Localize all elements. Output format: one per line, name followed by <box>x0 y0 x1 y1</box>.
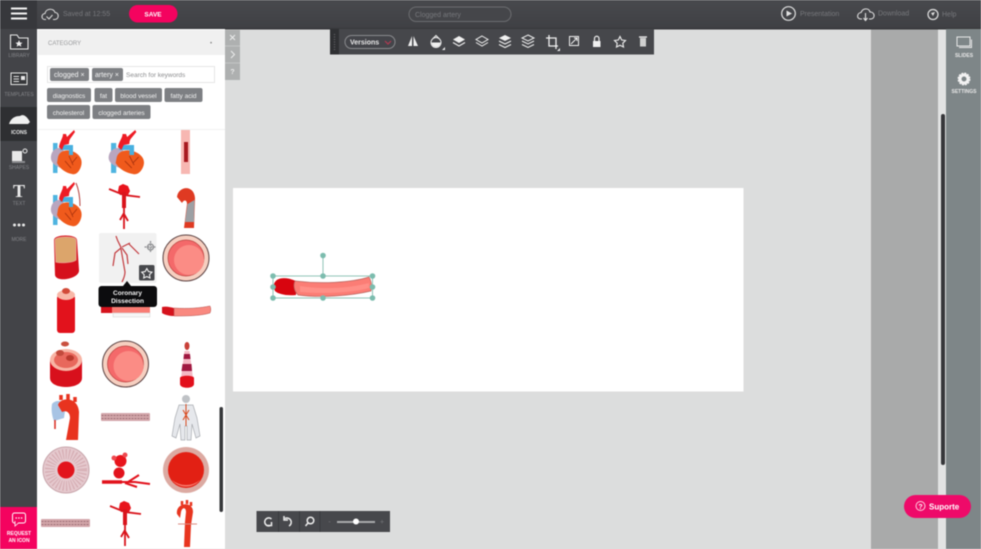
icon grid <box>40 130 224 548</box>
tag: artery <box>92 68 123 81</box>
icon: occluded artery cross-section <box>163 447 209 493</box>
sidebar item: more <box>12 224 27 243</box>
icon: move cursor <box>144 241 156 253</box>
sidebar item: slides <box>955 37 974 59</box>
icon: open artery segment <box>54 236 79 279</box>
tag: clogged <box>50 68 89 81</box>
tooltip: coronary dissection: Dissection <box>111 298 144 305</box>
icon: menu button <box>0 0 37 29</box>
icon: coronary tree <box>110 501 141 546</box>
icon: aortic arch with valve <box>52 394 79 440</box>
object toolbar <box>330 29 654 54</box>
icon: aortic arch <box>177 188 195 228</box>
sidebar item: slides: SLIDES <box>955 53 974 59</box>
icon: aneurysm branch <box>102 452 150 487</box>
panel side controls <box>225 30 240 80</box>
download button <box>858 9 909 20</box>
icon: delete <box>639 37 647 46</box>
versions dropdown <box>345 36 395 48</box>
saved status: Saved at 12:55 <box>63 11 110 18</box>
icon: artery cross-section <box>102 341 148 387</box>
selection handles <box>270 253 375 301</box>
icon: artery wall strip <box>41 519 90 527</box>
category header <box>38 30 225 55</box>
sidebar item: text: TEXT <box>13 201 25 207</box>
suggested keyword tags <box>47 88 202 119</box>
request an icon button: REQUEST <box>7 531 31 537</box>
request an icon button: AN ICON <box>8 538 30 544</box>
search field with tags <box>48 66 214 82</box>
sidebar item: icons active <box>0 107 37 141</box>
icon: bring to front <box>499 35 511 48</box>
panel side controls: ? <box>230 69 235 76</box>
help button <box>928 10 957 20</box>
suggested keyword tags: fatty acid <box>170 93 197 100</box>
icon: bring forward <box>453 36 465 46</box>
icon: stenosed artery vertical <box>181 125 190 174</box>
icon: coronary dissection <box>113 236 139 282</box>
icon: favorite star <box>614 36 626 47</box>
icon: horizontal artery <box>162 306 211 316</box>
icon: crop <box>546 35 560 51</box>
icon: horizontal artery behind tooltip <box>101 305 150 317</box>
icon: send to back <box>522 35 534 48</box>
icon: resize <box>570 36 578 46</box>
selected artery on canvas <box>270 253 375 301</box>
download button: Download <box>878 10 909 18</box>
icon: send backward <box>476 36 488 46</box>
top bar <box>0 0 981 30</box>
icon: search <box>306 517 314 526</box>
artery drawing <box>274 277 372 296</box>
icon: artery wall strip <box>101 413 150 421</box>
icon: coronary tree <box>109 184 140 229</box>
icon: color fill <box>431 36 445 50</box>
support button: Suporte <box>929 502 960 512</box>
icon: descending aorta <box>177 500 197 547</box>
support button: ? <box>918 504 923 511</box>
left icon sidebar <box>0 29 37 549</box>
zoom toolbar <box>256 511 390 532</box>
sidebar item: shapes: SHAPES <box>9 165 30 171</box>
sidebar item: text: T <box>13 181 25 201</box>
canvas workspace background <box>225 29 981 549</box>
canvas scrollbar <box>941 114 945 465</box>
icon library panel <box>37 29 225 549</box>
icon: layered artery cone <box>180 342 194 388</box>
icon: artery cross-section <box>163 235 209 281</box>
sidebar item: templates: TEMPLATES <box>4 92 34 98</box>
sidebar item: more: MORE <box>12 237 27 243</box>
sidebar item: settings <box>951 73 977 95</box>
suggested keyword tags: cholesterol <box>53 110 85 117</box>
zoom slider <box>328 518 384 526</box>
help button: Help <box>942 12 957 18</box>
selection frame <box>273 255 372 298</box>
right grey margin <box>871 29 938 549</box>
suggested keyword tags: fat <box>100 93 107 100</box>
suggested keyword tags: clogged arteries <box>98 110 145 117</box>
support button <box>904 495 971 518</box>
category header: CATEGORY <box>48 41 81 47</box>
versions dropdown: Versions <box>350 40 379 46</box>
right sidebar <box>946 29 981 549</box>
tag: clogged: clogged × <box>54 72 85 79</box>
icon: heart <box>109 130 144 174</box>
icon: cut artery with clots <box>57 288 75 333</box>
sidebar item: shapes <box>9 149 30 171</box>
icon: redo <box>265 518 272 526</box>
icon: undo <box>284 516 291 526</box>
tooltip: coronary dissection: Coronary <box>113 290 142 297</box>
panel scrollbar <box>220 407 223 512</box>
sidebar item: icons active: ICONS <box>11 130 28 136</box>
suggested keyword tags: blood vessel <box>120 93 157 100</box>
icon: short artery with clots <box>50 342 82 387</box>
zoom slider: + <box>380 519 384 526</box>
save button: SAVE <box>144 12 162 18</box>
zoom slider: - <box>328 519 331 526</box>
icon: favorite star button <box>139 265 154 280</box>
icon: human body circulatory system <box>172 395 200 440</box>
sidebar item: templates <box>4 73 34 98</box>
icon: heart <box>51 130 82 174</box>
right scroll track <box>938 29 946 549</box>
sidebar item: settings: SETTINGS <box>951 89 977 95</box>
request an icon button <box>0 507 37 549</box>
icon: thick wall section <box>43 447 89 493</box>
save button <box>129 5 178 22</box>
tag: artery: artery × <box>95 72 119 79</box>
tooltip: coronary dissection <box>98 281 157 307</box>
document title field: Clogged artery <box>415 12 461 19</box>
search field with tags: Search for keywords <box>126 72 186 79</box>
presentation button <box>782 7 839 20</box>
icon: heart with vessel <box>51 182 82 226</box>
document title field <box>409 7 511 22</box>
canvas page <box>233 188 744 392</box>
suggested keyword tags: diagnostics <box>53 93 86 100</box>
icon: flip <box>408 36 418 46</box>
sidebar item: library: LIBRARY <box>8 53 30 59</box>
icon: cloud saved <box>42 9 58 20</box>
presentation button: Presentation <box>800 11 839 18</box>
icon: lock <box>593 36 600 47</box>
selected icon tile <box>99 233 156 283</box>
sidebar item: library <box>8 35 30 59</box>
category header: • <box>210 41 212 47</box>
